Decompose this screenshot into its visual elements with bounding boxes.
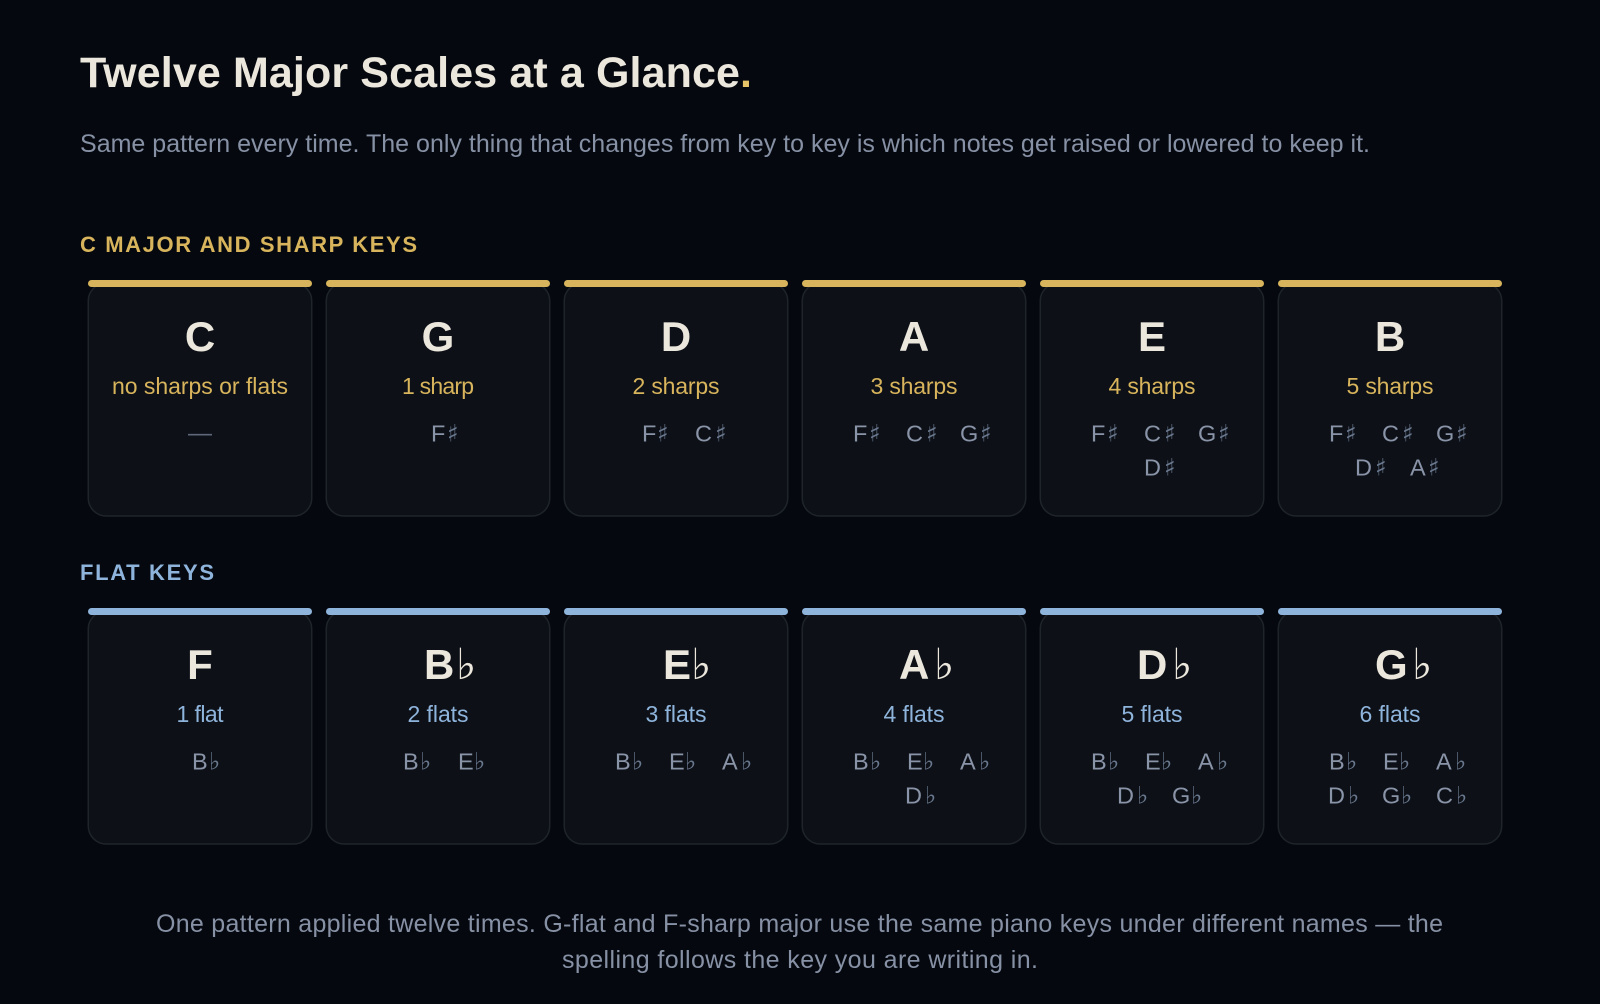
footer note bbox=[156, 910, 1443, 974]
card: D major: 2 sharps bbox=[632, 373, 720, 399]
card: G flat major: ♭ bbox=[1455, 748, 1466, 776]
card: D flat major: D bbox=[1137, 641, 1167, 688]
heading: flat keys: FLAT KEYS bbox=[80, 560, 214, 585]
card: D major bbox=[564, 280, 788, 516]
card: E major: C bbox=[1144, 420, 1161, 446]
card: A major: C bbox=[906, 420, 923, 446]
card: G flat major: G bbox=[1375, 641, 1408, 688]
card: D major: C bbox=[695, 420, 712, 446]
card: B major: ♯ bbox=[1402, 420, 1414, 448]
card: D flat major: ♭ bbox=[1172, 640, 1192, 690]
card: G major: ♯ bbox=[447, 420, 459, 448]
subtitle: Same pattern every time. The only thing that changes from key to key is which notes get raised or lowered to keep it. bbox=[80, 130, 1370, 158]
card: D major: ♯ bbox=[657, 420, 669, 448]
card: G flat major: D bbox=[1328, 782, 1345, 808]
card: B major: B bbox=[1375, 313, 1405, 360]
card: B flat major: B bbox=[424, 641, 454, 688]
card: F major: ♭ bbox=[209, 748, 220, 776]
card: A major: ♯ bbox=[926, 420, 938, 448]
panel: flat keys row bbox=[88, 608, 1502, 844]
card: B major: ♯ bbox=[1428, 454, 1440, 482]
card: D flat major: ♭ bbox=[1137, 782, 1148, 810]
card: E major: ♯ bbox=[1107, 420, 1119, 448]
card: A major: F bbox=[853, 420, 867, 446]
card: B flat major: ♭ bbox=[474, 748, 485, 776]
card: A flat major: ♭ bbox=[923, 748, 934, 776]
card: G flat major: ♭ bbox=[1412, 640, 1432, 690]
card: A major: 3 sharps bbox=[870, 373, 958, 399]
card: C major: — bbox=[188, 420, 212, 447]
card: B major: G bbox=[1436, 420, 1454, 446]
card: D major: F bbox=[642, 420, 656, 446]
card: B major: 5 sharps bbox=[1346, 373, 1434, 399]
card: E major: D bbox=[1144, 454, 1161, 480]
card: A major: ♯ bbox=[980, 420, 992, 448]
card: B major: F bbox=[1329, 420, 1343, 446]
card: E major: E bbox=[1138, 313, 1166, 360]
card: D flat major: ♭ bbox=[1217, 748, 1228, 776]
card: B flat major: ♭ bbox=[420, 748, 431, 776]
card: E flat major: ♭ bbox=[685, 748, 696, 776]
card: A flat major: ♭ bbox=[925, 782, 936, 810]
card: E major bbox=[1040, 280, 1264, 516]
card: B flat major: 2 flats bbox=[408, 701, 468, 727]
card: C major: C bbox=[185, 313, 215, 360]
card: D flat major: A bbox=[1198, 748, 1214, 774]
card: G flat major: 6 flats bbox=[1360, 701, 1420, 727]
card: B flat major bbox=[326, 608, 550, 844]
card: A flat major: B bbox=[853, 748, 869, 774]
card: G major: 1 sharp bbox=[402, 373, 474, 399]
card: B major bbox=[1278, 280, 1502, 516]
card: A flat major: D bbox=[905, 782, 922, 808]
card: E major: ♯ bbox=[1164, 420, 1176, 448]
card: G flat major: C bbox=[1436, 782, 1453, 808]
card: F major: B bbox=[192, 748, 208, 774]
card: E flat major: ♭ bbox=[632, 748, 643, 776]
title: Twelve Major Scales at a Glance. bbox=[80, 49, 752, 97]
card: B flat major: ♭ bbox=[456, 640, 476, 690]
card: C major: no sharps or flats bbox=[112, 373, 288, 399]
card: D flat major: ♭ bbox=[1161, 748, 1172, 776]
heading: sharp keys: C MAJOR AND SHARP KEYS bbox=[80, 232, 417, 257]
card: A major bbox=[802, 280, 1026, 516]
card: A flat major: ♭ bbox=[870, 748, 881, 776]
card: G flat major: ♭ bbox=[1348, 782, 1359, 810]
card: E major: ♯ bbox=[1218, 420, 1230, 448]
card: E major: ♯ bbox=[1164, 454, 1176, 482]
card: D flat major: G bbox=[1172, 782, 1190, 808]
card: B flat major: E bbox=[458, 748, 474, 774]
card: F major bbox=[88, 608, 312, 844]
card: B major: A bbox=[1410, 454, 1426, 480]
card: E flat major: E bbox=[663, 641, 691, 688]
card: F major: F bbox=[187, 641, 213, 688]
card: G flat major: E bbox=[1383, 748, 1399, 774]
footer note: spelling follows the key you are writing in. bbox=[562, 946, 1038, 974]
card: B major: ♯ bbox=[1345, 420, 1357, 448]
card: E flat major: ♭ bbox=[741, 748, 752, 776]
footer note: One pattern applied twelve times. G-flat and F-sharp major use the same piano keys under different names — the bbox=[156, 910, 1443, 938]
card: D flat major: D bbox=[1117, 782, 1134, 808]
card: G flat major: G bbox=[1382, 782, 1400, 808]
card: A flat major: ♭ bbox=[979, 748, 990, 776]
card: E flat major: ♭ bbox=[691, 640, 711, 690]
card: B major: ♯ bbox=[1456, 420, 1468, 448]
card: B flat major: B bbox=[403, 748, 419, 774]
card: D flat major: ♭ bbox=[1191, 782, 1202, 810]
card: A flat major: 4 flats bbox=[884, 701, 944, 727]
card: G flat major: ♭ bbox=[1399, 748, 1410, 776]
card: G flat major: ♭ bbox=[1401, 782, 1412, 810]
card: A flat major: A bbox=[960, 748, 976, 774]
card: C major bbox=[88, 280, 312, 516]
card: E flat major bbox=[564, 608, 788, 844]
card: G flat major: A bbox=[1436, 748, 1452, 774]
card: G flat major bbox=[1278, 608, 1502, 844]
card: E flat major: A bbox=[722, 748, 738, 774]
card: E flat major: 3 flats bbox=[646, 701, 706, 727]
card: B major: D bbox=[1355, 454, 1372, 480]
card: D major: ♯ bbox=[715, 420, 727, 448]
card: D flat major: B bbox=[1091, 748, 1107, 774]
card: G major: G bbox=[422, 313, 454, 360]
card: D flat major: 5 flats bbox=[1122, 701, 1182, 727]
card: E major: 4 sharps bbox=[1108, 373, 1196, 399]
card: E major: G bbox=[1198, 420, 1216, 446]
card: F major: 1 flat bbox=[176, 701, 224, 727]
card: B major: C bbox=[1382, 420, 1399, 446]
card: A major: ♯ bbox=[869, 420, 881, 448]
card: B major: ♯ bbox=[1375, 454, 1387, 482]
card: G flat major: ♭ bbox=[1456, 782, 1467, 810]
card: G major: F bbox=[431, 420, 445, 446]
card: G flat major: B bbox=[1329, 748, 1345, 774]
card: A major: G bbox=[960, 420, 978, 446]
card: G major bbox=[326, 280, 550, 516]
card: A major: A bbox=[899, 313, 929, 360]
card: E flat major: E bbox=[669, 748, 685, 774]
card: A flat major: A bbox=[899, 641, 929, 688]
card: E major: F bbox=[1091, 420, 1105, 446]
panel: sharp keys row bbox=[88, 280, 1502, 516]
card: D flat major bbox=[1040, 608, 1264, 844]
card: D flat major: ♭ bbox=[1108, 748, 1119, 776]
card: D major: D bbox=[661, 313, 691, 360]
card: E flat major: B bbox=[615, 748, 631, 774]
card: D flat major: E bbox=[1145, 748, 1161, 774]
card: A flat major: ♭ bbox=[934, 640, 954, 690]
card: G flat major: ♭ bbox=[1346, 748, 1357, 776]
card: A flat major: E bbox=[907, 748, 923, 774]
card: A flat major bbox=[802, 608, 1026, 844]
